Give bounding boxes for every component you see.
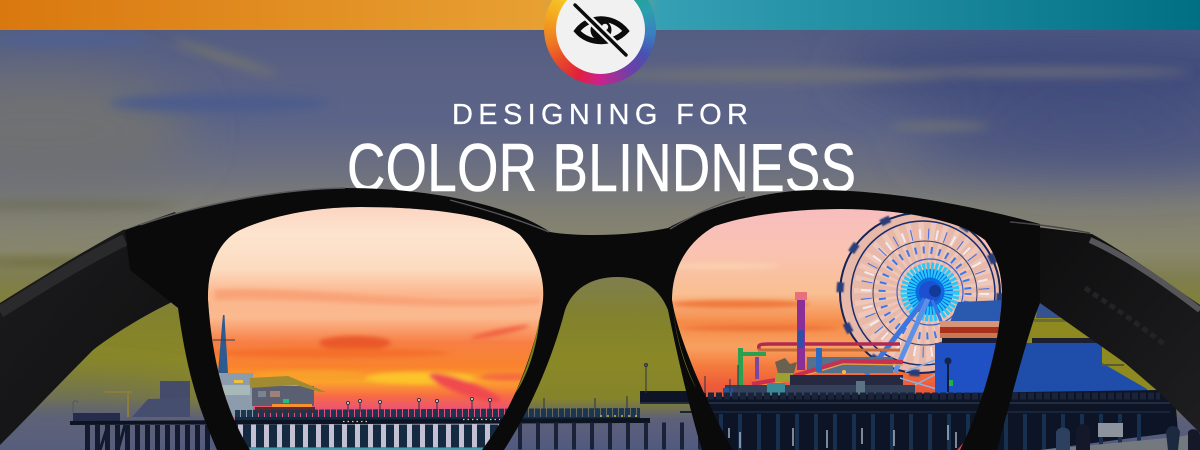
tower — [795, 292, 807, 370]
icon badge: colour wheel with crossed-out eye — [544, 0, 656, 85]
rear pier buildings — [723, 370, 915, 397]
pier street lamps — [346, 364, 738, 412]
left lens: full-colour sunset with pier building — [200, 205, 550, 450]
title — [347, 99, 856, 205]
street lamp — [944, 358, 953, 392]
left pier: crowd, deck and pilings — [70, 413, 700, 438]
glasses frame — [125, 188, 1040, 450]
teal water line — [248, 447, 484, 450]
ship building: hull — [220, 373, 253, 417]
crowd on building — [942, 338, 997, 343]
left temple arm — [0, 212, 195, 445]
food stall — [940, 321, 1006, 338]
stairs and ride base — [900, 360, 940, 390]
blue roof panel — [950, 300, 1005, 322]
restaurant building — [250, 376, 326, 413]
ferris wheel — [840, 213, 1000, 373]
right lens: full-colour sunset with amusement park — [672, 209, 1002, 397]
ship building: mast — [213, 315, 235, 373]
pale water behind pilings — [230, 424, 500, 447]
roller coaster track — [752, 344, 903, 387]
icon: crossed-out eye — [575, 5, 626, 55]
green gantry — [738, 348, 766, 386]
blue wall behind coaster — [807, 357, 893, 373]
blue building and yard seen outside the lens — [1000, 303, 1160, 395]
blue building in lens — [935, 343, 996, 393]
right temple arm — [1013, 224, 1200, 433]
blue post — [816, 348, 822, 372]
ferris wheel support legs — [866, 299, 950, 375]
frame highlights — [140, 188, 1090, 233]
right pier: rail, beams and pilings — [640, 390, 1178, 450]
palm and coaster car — [775, 358, 797, 382]
heading: designing for: DESIGNING FOR — [452, 99, 748, 131]
beach and pedestrians at lower right — [957, 423, 1200, 450]
olive lens-edge crescents — [514, 305, 696, 395]
top gradient bar — [0, 0, 1200, 30]
heading: color blindness: COLOR BLINDNESS — [347, 130, 856, 205]
left pier structures outside the lens — [73, 381, 190, 450]
